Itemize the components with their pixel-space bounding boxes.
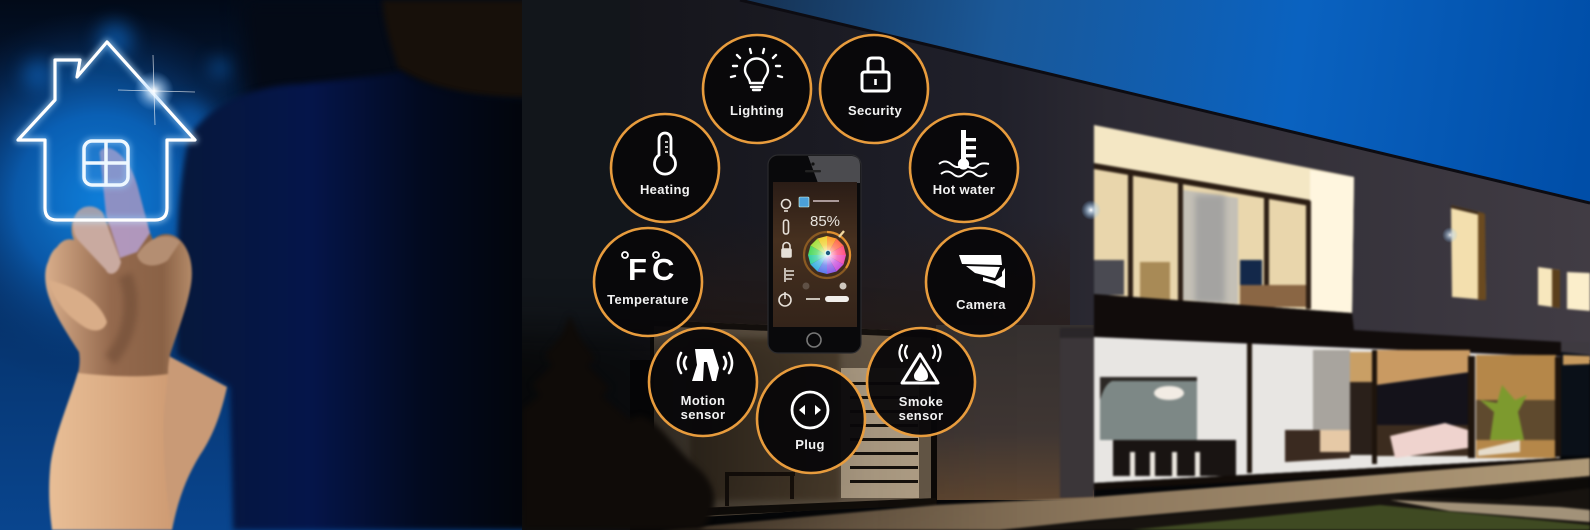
home button [807,333,821,347]
panel: night house photograph [522,0,1590,530]
smartphone with control app [768,155,861,353]
feature ring: Camera [926,228,1034,336]
label: Motion sensor: sensor [681,407,725,422]
feature ring: Plug [757,365,865,473]
feature ring: Security [820,35,928,143]
label: Camera: Camera [956,297,1006,312]
power slider [825,296,849,302]
feature ring: Temperature [594,228,702,336]
far right night view [1561,352,1590,456]
app menu icons [779,200,794,306]
icon: light flare on roof [118,55,195,125]
label: Smoke sensor: sensor [899,408,943,423]
feature ring: Hot water [910,114,1018,222]
house lower wall and opening [650,320,1094,520]
soft darkening on lower left [522,327,919,530]
label: Smoke sensor: Smoke [899,394,943,409]
sky [700,0,1590,210]
arm and hand [45,148,227,530]
wall small windows [1449,206,1480,301]
percentage readout: 85% [810,213,840,230]
label: Plug: Plug [795,437,825,452]
icon: glowing house outline [18,42,195,220]
label: Heating: Heating [640,182,690,197]
house upper wall [630,0,1590,360]
icon: thermometer [655,133,675,174]
label: Motion sensor: Motion [681,393,725,408]
feature ring: Smoke sensor [867,328,975,436]
label: Hot water: Hot water [933,182,995,197]
label: Security: Security [848,103,902,118]
lower glazing [1094,337,1560,483]
label: Temperature: Temperature [607,292,689,307]
icon: hot water gauge [939,130,989,176]
patio and lawn [660,458,1590,530]
panel: man pressing smart home icon [0,0,540,530]
label: Lighting: Lighting [730,103,784,118]
icon: Fahrenheit and Celsius: F [628,252,647,287]
icon: Fahrenheit and Celsius: C [652,252,674,287]
light flares [1081,200,1458,243]
feature ring: Lighting [703,35,811,143]
black floor band [1094,294,1563,356]
phone screen [773,182,857,327]
right main block [1060,125,1590,498]
icon: smoke warning triangle [900,345,940,383]
icon: padlock [862,58,889,91]
feature ring: Heating [611,114,719,222]
colour wheel [804,231,850,278]
feature ring: Motion sensor [649,328,757,436]
icon: light bulb [731,49,782,90]
icon: power socket [792,392,828,428]
icon: legs with motion waves [678,349,732,381]
upper glazed recess [1094,125,1354,313]
icon: security camera [959,255,1005,288]
icon: Fahrenheit and Celsius [622,252,674,287]
trees [522,315,714,530]
